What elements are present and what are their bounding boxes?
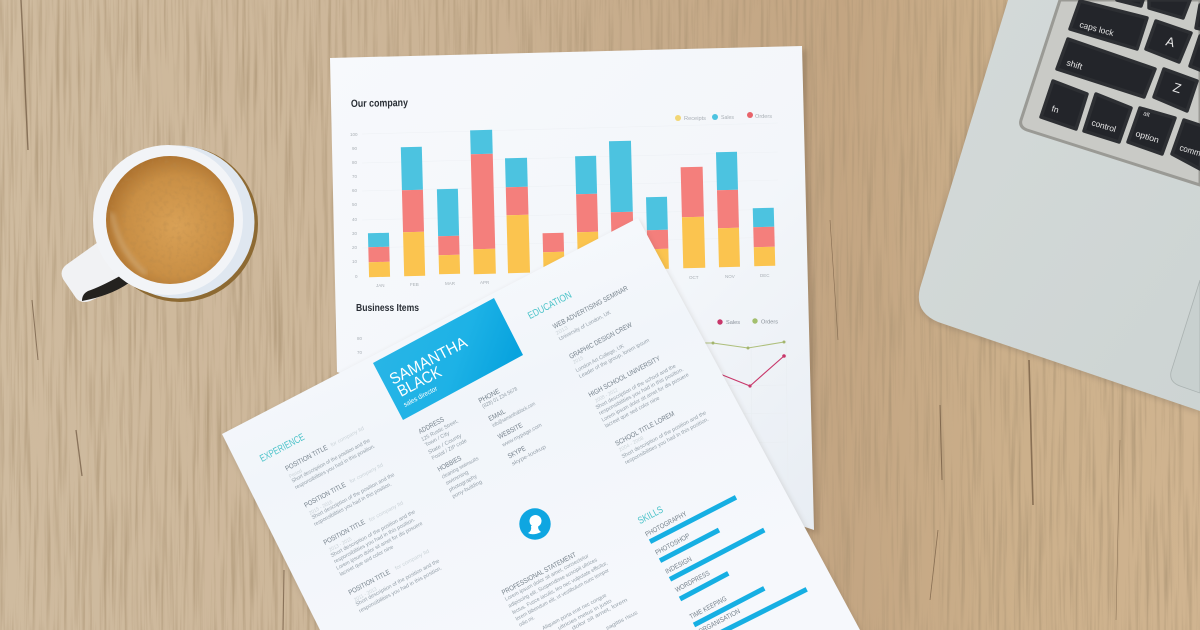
key labels: Z [1171,80,1183,96]
section: experience: Short description of the position and the [355,558,441,608]
chart legend: Receipts, Sales, Orders: Receipts [684,116,707,122]
section: experience: lacreet que sed color nine [339,544,395,578]
section: experience: responsibilities you had in this position. [358,566,443,614]
section: contact details [478,386,547,467]
section: address and hobbies [418,416,483,500]
trackpad [1171,280,1200,393]
section: education: EDUCATION [526,290,574,322]
section: professional statement: adipiscing elit. Suspendisse suscipit ultrices [507,557,599,609]
coffee crema [106,156,234,284]
line chart legend: Sales [726,320,740,326]
line chart y axis labels: 80 [357,336,363,341]
section: professional statement: Lorem ipsum dolor sit amet, consectetur [504,553,590,603]
section: contact details: WEBSITE [497,422,524,441]
bar: November [716,152,740,267]
name banner [373,298,523,420]
section: education: Lorem ipsum dolor sit amet for dis posuere [601,372,690,423]
bar: August [609,141,634,242]
laptop [918,0,1200,413]
job title: sales director [403,385,439,409]
section: experience: POSITION TITLE [348,569,392,597]
chart legend: Receipts, Sales, Orders: Sales [721,115,735,121]
stacked bar chart [350,123,778,288]
line series: orders [700,340,786,350]
chart grid lines and axis labels: 90 [352,146,358,151]
section: address and hobbies: ADDRESS [418,416,446,436]
chart grid lines and axis labels: APR [480,280,490,285]
section: skills: WORDPRESS [674,570,711,594]
section: experience: for company ltd [394,549,431,572]
section: skills: TIME KEEPING [689,596,728,621]
line chart y axis labels: 70 [357,350,363,355]
section: skills [636,497,807,630]
chart legend: Receipts, Sales, Orders: Orders [755,114,773,120]
section: education: London Art College, UK [575,343,626,374]
paper: chart sheet [330,46,818,534]
section: professional statement: odio mi. [518,615,536,628]
section: skills: PHOTOSHOP [654,533,691,557]
chart grid lines and axis labels: DEC [760,273,770,278]
line chart legend: Orders [761,320,778,326]
section: contact details: SKYPE [507,445,527,460]
section: experience: POSITION TITLE [323,519,367,547]
section: experience: responsibilities you had in this position. [294,444,376,491]
key labels: option [1134,128,1161,145]
mug rim [93,145,243,295]
section: experience: responsibilities you had in this position. [333,517,416,565]
key labels: caps lock [1078,19,1116,38]
section: education: Short description of the school and the [595,364,677,411]
key labels: alt [1142,111,1151,119]
coffee mug [62,145,258,302]
chart grid lines and axis labels: 80 [352,160,358,165]
section: professional statement: lorem bibendum elit, ut vestibulum nunc tempor [515,568,611,622]
section: address and hobbies: 125 Rustic Street, [420,418,460,443]
section: address and hobbies: swimming [445,470,470,487]
chart grid lines and axis labels: JAN [376,283,385,288]
chart grid lines and axis labels: NOV [725,274,735,279]
key labels: control [1090,117,1117,134]
section: education: responsibilities you had in this position. [598,367,685,417]
chart grid lines and axis labels: 60 [352,188,358,193]
section: contact details: EMAIL [488,408,507,423]
chart grid lines and axis labels: FEB [410,282,419,287]
section: experience: 2015 - 2016 [308,499,334,517]
section: education: HIGH SCHOOL UNIVERSITY [588,355,662,399]
section: education [526,285,710,466]
chart grid lines and axis labels: 40 [352,217,358,222]
name: Samantha Black: SAMANTHA [387,334,471,389]
section: address and hobbies: photography [448,473,479,493]
chart grid lines and axis labels: 70 [352,174,358,179]
section: experience: Lorem ipsum dolor sit amet for dis posuere [335,521,424,572]
bar: March [437,189,460,274]
section: contact details: www.mypage.com [501,422,544,449]
chart grid lines and axis labels: 30 [352,231,358,236]
section: education: 2015 [572,355,585,366]
section: professional statement: lectus. Fusce iaculis, leo nec vulputate efficitur, [511,560,609,616]
saucer [102,146,258,302]
chart grid lines and axis labels: MAR [445,281,456,286]
section: contact details: PHONE [478,388,502,405]
section: skills: INDESIGN [664,556,693,576]
key labels: fn [1050,103,1060,115]
key labels: A [1164,33,1177,50]
bar: May [505,158,530,273]
bar: April [470,130,496,274]
line series: sales [715,354,786,388]
section: contact details: skype-lookup [511,444,547,467]
chart grid lines and axis labels: 20 [352,245,358,250]
section: education: Leader of the group, lorem ipsum [578,337,651,380]
section: address and hobbies: Town / City [424,430,451,448]
chart grid lines and axis labels [350,123,778,288]
section: experience: 2013 - 2015 [328,536,353,553]
section: experience: POSITION TITLE [303,482,347,509]
chart grid lines and axis labels: 10 [352,259,358,264]
key labels [1050,19,1200,162]
section: professional statement [501,551,639,630]
section: education: University of London, UK [558,310,612,342]
section: contact details: (828) 01 234 5678 [481,386,519,410]
section: address and hobbies: pony-building [451,479,483,500]
section: address and hobbies: State / County [427,433,463,456]
section: experience: for company ltd [330,426,365,448]
bar: October [681,167,705,268]
chart grid lines and axis labels: OCT [689,275,699,280]
line chart legend [717,318,778,326]
keyboard well [1021,0,1200,185]
bar: January [368,233,390,277]
line chart y axis labels [357,336,363,355]
section: experience: for company ltd [349,462,384,485]
paper: resume sheet [222,218,863,630]
bar: September [646,197,669,269]
section: education: lacreet que sed color nine [604,396,661,429]
section: address and hobbies: Postal / ZIP code [431,438,468,462]
chart grid lines and axis labels: 50 [352,202,358,207]
section: experience: responsibilities you had in this position. [313,482,393,528]
section: education: SCHOOL TITLE LOREM [614,411,676,448]
section: experience: EXPERIENCE [258,432,307,465]
section: education: 2004 - 2008 [618,435,645,453]
section: education: Short description of the position and the [621,410,708,460]
section: skills: SKILLS [636,504,665,527]
keyboard keys [1041,0,1200,169]
section: skills: PHOTOGRAPHY [644,511,688,538]
section: education: WEB ADVERTISING SEMINAR [552,285,629,331]
section: experience: for company ltd [368,500,405,523]
section: experience: Short description of the position and the [291,438,371,484]
section: education: GRAPHIC DESIGN CREW [568,322,634,361]
section: education: 2013 [555,325,569,337]
bar: February [401,147,425,276]
section: contact details: info@samanthablack.com [491,401,537,429]
bar: December [753,208,775,266]
section: professional statement: PROFESSIONAL STATEMENT [501,551,578,597]
key labels: shift [1065,57,1084,72]
heading: Business Items: Business Items [356,303,419,314]
section: experience: Short description of the position and the [330,509,417,559]
section: address and hobbies: HOBBIES [437,455,463,473]
mug handle [62,240,129,302]
section: address and hobbies: cleaning swimsuits [441,456,480,480]
bar: July [575,156,599,262]
section: experience [258,426,443,614]
section: experience: Short description of the position and the [311,472,396,521]
section: experience: 2011 - 2013 [353,586,378,603]
chart legend: Receipts, Sales, Orders [675,112,773,122]
chart grid lines and axis labels: 0 [355,274,358,279]
heading: Our company: Our company [351,97,408,110]
bar: June [543,233,565,270]
chart grid lines and axis labels: 100 [350,132,358,137]
section: education: 2008 - 2012 [594,387,619,404]
section: experience: POSITION TITLE [284,444,329,473]
line chart [357,318,788,480]
name: Samantha Black: BLACK [395,364,445,401]
icon: avatar [519,508,551,540]
section: experience: Period [288,468,303,480]
section: education: responsibilities you had in this position. [624,417,710,466]
